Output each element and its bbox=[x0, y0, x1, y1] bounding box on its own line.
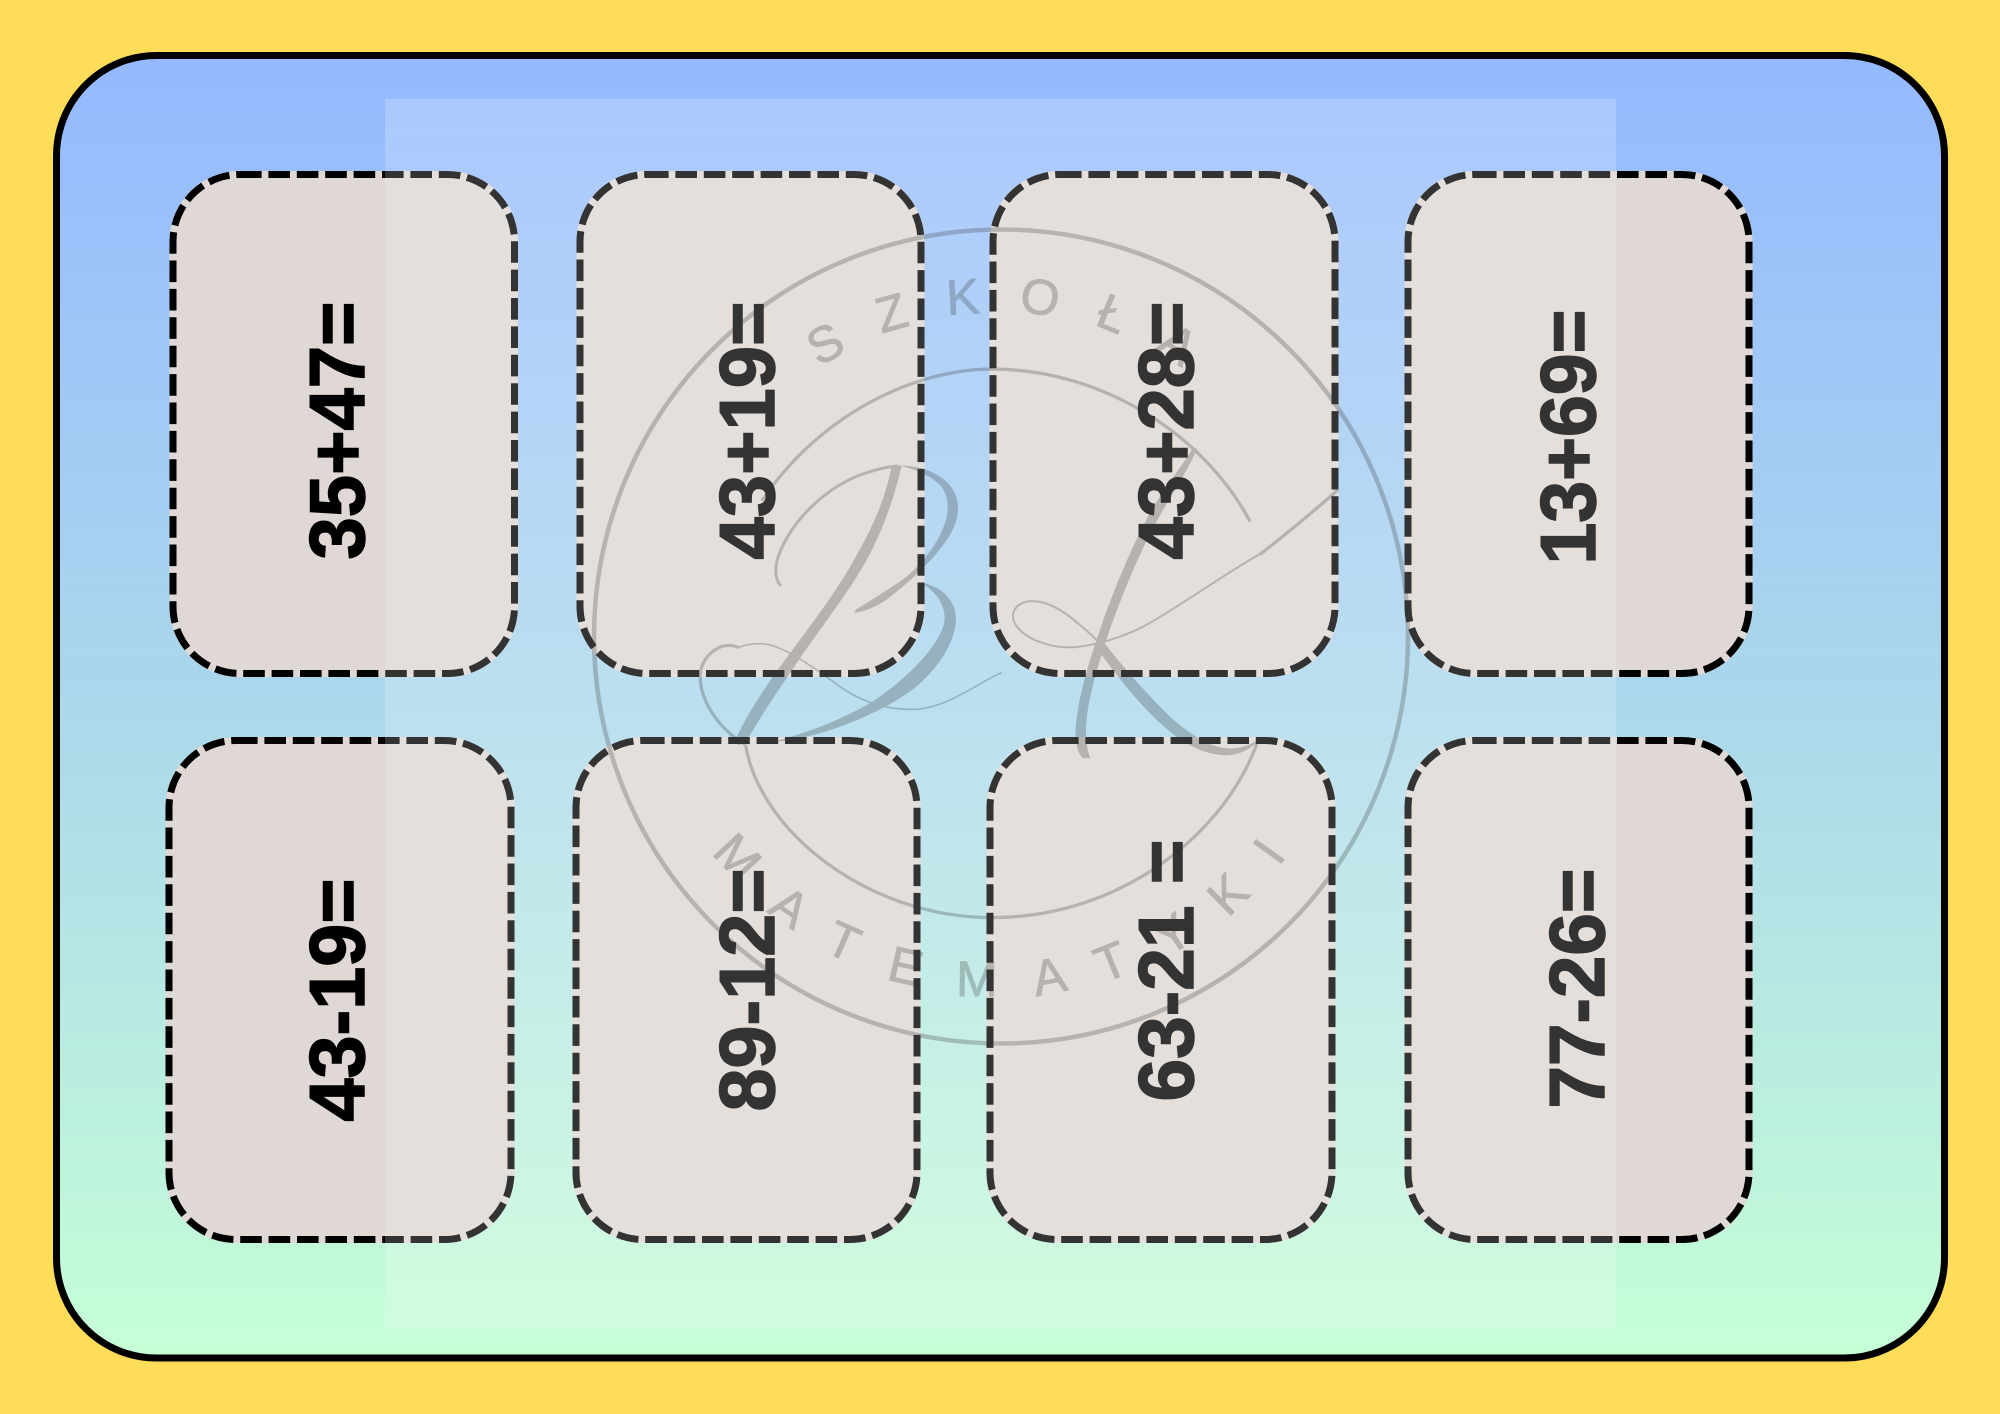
card: 43-19= bbox=[166, 737, 514, 1243]
seal text: bottom: MATEMATYKI bbox=[713, 832, 1285, 997]
card: 43+28= bbox=[990, 171, 1338, 677]
card: 77-26=: 77-26= bbox=[1533, 868, 1621, 1108]
letter B upper bowl bbox=[854, 465, 958, 613]
letter K loop and upper arm bbox=[1013, 554, 1260, 647]
card: 63-21 =: 63-21 = bbox=[1122, 840, 1210, 1102]
letter B lower bowl bbox=[773, 583, 956, 742]
seal text: top: SZKOŁA bbox=[808, 278, 1190, 368]
card: 43+19= bbox=[576, 171, 924, 677]
letter K stem bbox=[1076, 448, 1197, 758]
card: 77-26= bbox=[1404, 737, 1752, 1243]
translucent white overlay sheet bbox=[385, 99, 1616, 1329]
card: 43+28=: 43+28= bbox=[1122, 302, 1210, 560]
card: 35+47=: 35+47= bbox=[293, 302, 381, 560]
inner arcs and flourish links bbox=[700, 369, 1338, 918]
letter K lower leg bbox=[1093, 642, 1260, 755]
card: 13+69= bbox=[1404, 171, 1752, 677]
watermark: school seal bbox=[592, 227, 1410, 1046]
card: 13+69=: 13+69= bbox=[1524, 310, 1612, 564]
card: 35+47= bbox=[170, 171, 518, 677]
card: 89-12=: 89-12= bbox=[703, 868, 791, 1112]
card: 89-12= bbox=[572, 737, 920, 1243]
card: 43-19=: 43-19= bbox=[293, 878, 381, 1122]
seal outer ring bbox=[594, 230, 1408, 1044]
letter B top swash bbox=[776, 466, 898, 586]
monogram BK bbox=[735, 448, 1260, 758]
card: 43+19=: 43+19= bbox=[703, 302, 791, 560]
letter B flourish bbox=[737, 644, 1002, 709]
card: 63-21 = bbox=[986, 737, 1336, 1243]
letter B stem bbox=[735, 466, 902, 745]
